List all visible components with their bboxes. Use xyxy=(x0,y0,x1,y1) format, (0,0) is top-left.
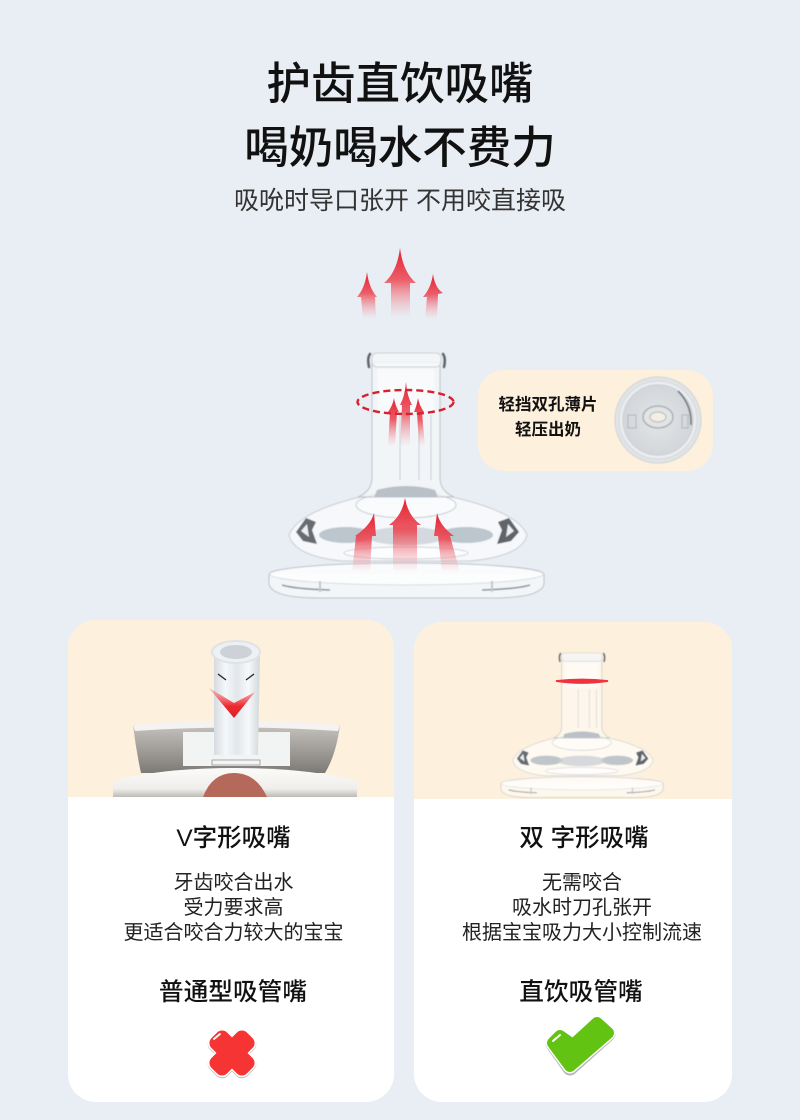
red ring on small nipple xyxy=(556,680,608,683)
left card body text: 牙齿咬合出水 xyxy=(174,872,294,894)
arrows: upward flow above nipple xyxy=(357,248,443,319)
dashed ring xyxy=(358,390,454,414)
left card body text: 受力要求高 xyxy=(184,897,284,919)
callout text: 轻压出奶 xyxy=(515,421,581,439)
right card body text: 吸水时刀孔张开 xyxy=(512,897,652,919)
icon: large nipple xyxy=(269,353,544,598)
left card body text: 更适合咬合力较大的宝宝 xyxy=(124,922,344,944)
icon: straw cup with V-shaped mouthpiece xyxy=(113,641,357,797)
icon: small straight-drink nipple xyxy=(501,653,663,798)
left card footer label: 普通型吸管嘴 xyxy=(159,979,307,1006)
icon: lens top view xyxy=(615,377,701,463)
title: 喝奶喝水不费力 xyxy=(244,124,556,173)
arrows: flow inside neck xyxy=(388,382,425,447)
left card heading: V字形吸嘴 xyxy=(176,825,291,852)
panel: comparison card right background xyxy=(414,622,732,1102)
panel: comparison card left background xyxy=(68,620,394,1102)
panel: callout background xyxy=(478,370,713,471)
right card footer label: 直饮吸管嘴 xyxy=(519,979,643,1006)
left card body text xyxy=(124,872,344,944)
icon: green check xyxy=(553,1023,608,1068)
title: 护齿直饮吸嘴 xyxy=(266,60,534,109)
right card body text: 无需咬合 xyxy=(542,872,622,894)
callout text: 轻挡双孔薄片 xyxy=(498,396,598,414)
icon: red cross xyxy=(195,1016,269,1091)
right card heading: 双 字形吸嘴 xyxy=(519,825,649,852)
arrows: flow through base xyxy=(352,498,460,572)
callout text xyxy=(498,396,598,439)
right card body text xyxy=(462,872,702,944)
subtitle: 吸吮时导口张开 不用咬直接吸 xyxy=(234,186,566,214)
title xyxy=(244,60,556,173)
right card body text: 根据宝宝吸力大小控制流速 xyxy=(462,922,702,944)
